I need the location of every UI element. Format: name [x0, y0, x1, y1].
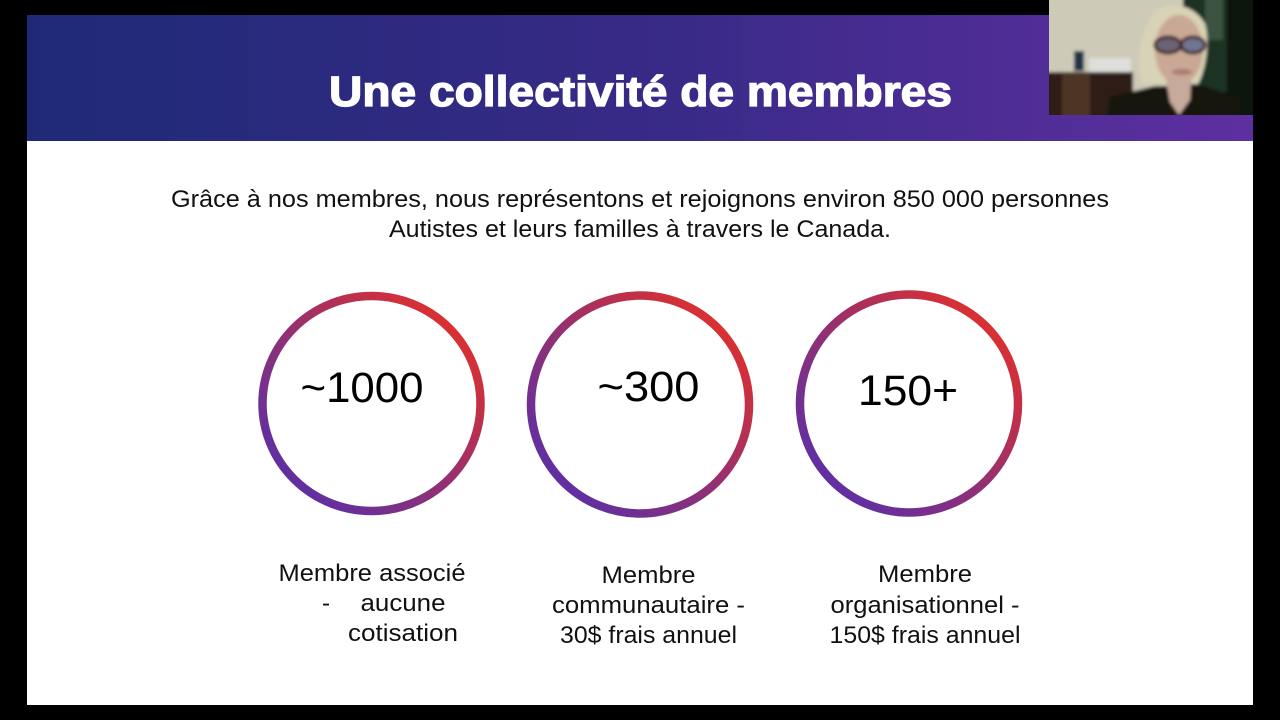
value 3: 150+: [858, 367, 958, 415]
label 2: communautaire -: [552, 592, 745, 619]
ring 2: [531, 296, 749, 514]
ring 3: [800, 294, 1018, 512]
label 3: 150$ frais annuel: [830, 622, 1020, 649]
stat: organizational members: [800, 294, 1020, 649]
label 1: Membre associé: [278, 560, 466, 587]
label 2: [552, 562, 745, 649]
label 2: Membre: [602, 562, 696, 589]
label 1: -: [322, 590, 330, 617]
label 1: cotisation: [348, 620, 458, 647]
intro text: Autistes et leurs familles à travers le Canada.: [389, 216, 891, 243]
label 1: aucune: [360, 590, 446, 617]
value 1: ~1000: [300, 364, 424, 412]
label 1: [278, 560, 466, 647]
stat: community members: [531, 296, 749, 649]
label 2: 30$ frais annuel: [560, 622, 737, 649]
label 3: Membre: [878, 561, 972, 588]
intro text: [171, 186, 1109, 243]
title: Une collectivité de membres: [329, 68, 952, 116]
stat: associate members: [262, 296, 480, 647]
value 2: ~300: [598, 363, 700, 411]
ring 1: [262, 296, 480, 511]
intro text: Grâce à nos membres, nous représentons et rejoignons environ 850 000 personnes: [171, 186, 1109, 213]
label 3: organisationnel -: [830, 592, 1020, 619]
webcam video of presenter: [1049, 0, 1253, 115]
header banner: [27, 15, 1253, 141]
label 3: [830, 561, 1020, 649]
